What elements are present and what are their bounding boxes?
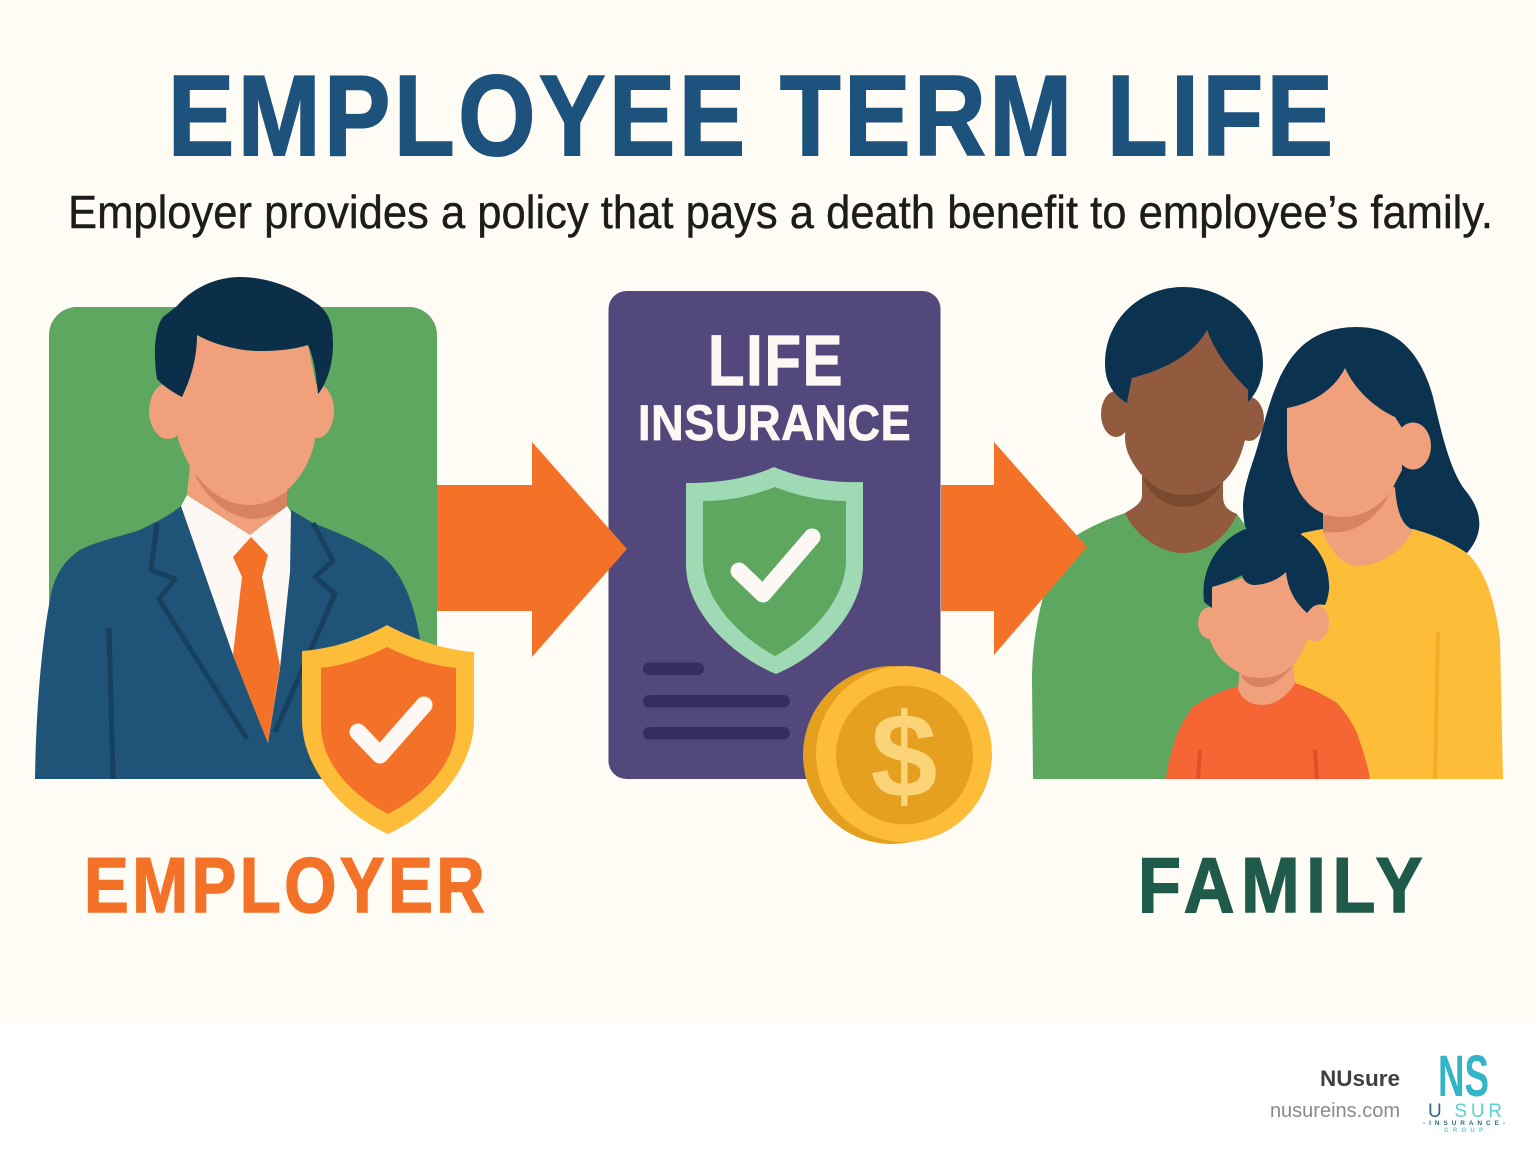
icon: dollar coin	[803, 666, 992, 844]
child face	[1210, 565, 1307, 678]
footer website: nusureins.com	[1270, 1100, 1400, 1122]
icon: employer shield	[302, 625, 474, 834]
child shirt seams	[1198, 750, 1317, 779]
subtitle: Employer provides a policy that pays a death benefit to employee’s family.	[68, 186, 1493, 238]
father face	[1125, 330, 1248, 495]
icon: dollar coin: $	[871, 689, 937, 823]
employer ears	[149, 383, 334, 439]
card heading: life: LIFE	[708, 321, 842, 400]
child hair	[1203, 525, 1329, 613]
mother ear	[1395, 422, 1431, 470]
employer hair	[155, 277, 333, 397]
card heading: insurance: INSURANCE	[638, 396, 911, 452]
arrow: policy to family	[941, 442, 1087, 655]
title: EMPLOYEE TERM LIFE	[168, 52, 1333, 180]
neck shadow	[195, 475, 287, 519]
necktie	[233, 537, 280, 743]
father hair	[1105, 287, 1263, 403]
logo insurance line: -INSURANCE-	[1423, 1120, 1505, 1127]
father neck shadow	[1142, 477, 1222, 507]
employer suit	[35, 506, 422, 779]
mother face	[1287, 368, 1402, 517]
icon: policy shield	[686, 467, 863, 674]
mother hair	[1243, 327, 1479, 600]
arrow: employer to policy	[437, 442, 627, 657]
panel: family illustration	[1032, 287, 1503, 779]
footer brand name: NUsure	[1320, 1066, 1400, 1091]
mother neck	[1323, 487, 1413, 566]
policy text lines	[643, 662, 790, 740]
logo wordmark: U SUR	[1428, 1101, 1502, 1122]
employer shirt collar	[181, 495, 291, 743]
child shirt	[1166, 683, 1370, 779]
father ears	[1101, 391, 1264, 441]
mother neck shadow	[1323, 493, 1390, 532]
father shirt	[1032, 513, 1260, 779]
label: employer: EMPLOYER	[84, 842, 485, 929]
employer neck	[187, 465, 287, 535]
child neck shadow	[1241, 665, 1293, 687]
mother sweater	[1250, 529, 1503, 779]
child neck	[1238, 660, 1295, 705]
green backdrop	[49, 307, 437, 660]
logo mark: NS	[1438, 1044, 1489, 1109]
panel: employer illustration	[35, 277, 474, 834]
lapel lines	[109, 523, 335, 779]
father neck	[1125, 470, 1237, 553]
policy card	[608, 291, 940, 779]
panel: life insurance policy	[608, 291, 992, 844]
logo group line: GROUP	[1444, 1128, 1483, 1134]
employer face	[178, 335, 318, 505]
child ears	[1198, 604, 1329, 642]
label: family: FAMILY	[1138, 842, 1422, 929]
sweater seam	[1435, 632, 1438, 779]
logo	[1423, 1044, 1505, 1134]
